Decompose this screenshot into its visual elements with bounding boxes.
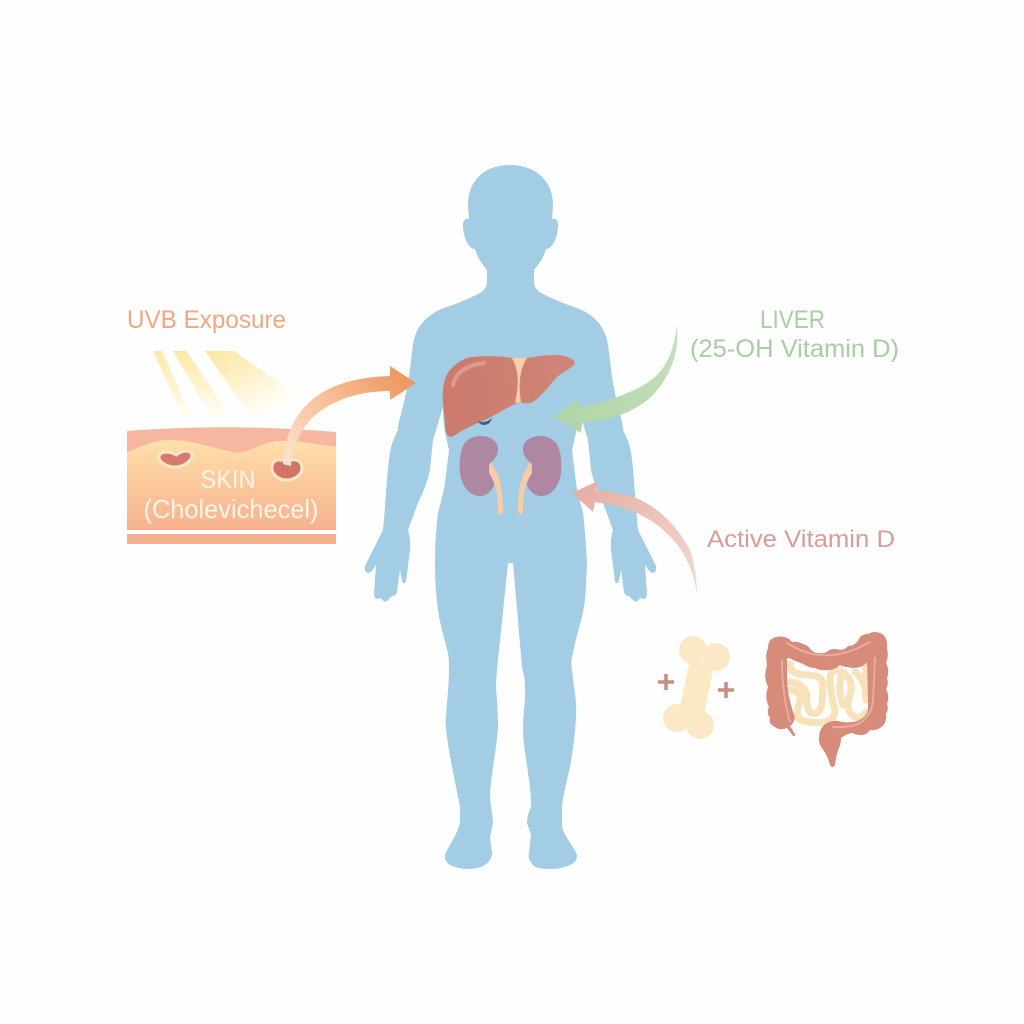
right kidney [523,436,561,496]
liver panel [553,306,899,433]
liver highlight [453,363,484,385]
label: LIVER (25-OH Vitamin D): (25-OH Vitamin D) [690,335,899,363]
liver ligament [512,358,527,403]
icon: right skin cell [272,460,302,480]
small intestine [790,664,866,723]
large intestine [765,632,888,767]
icon: plus right [718,682,734,698]
active vitamin D panel [572,481,895,767]
label: SKIN (Cholevichecel): SKIN [200,466,256,494]
arrow: skin to body [283,366,416,466]
arrow: liver to body [553,325,677,433]
label: LIVER (25-OH Vitamin D): LIVER [760,306,825,334]
heading: UVB Exposure: UVB Exposure [127,306,286,334]
icon: bone [663,636,730,739]
left ureter [489,462,503,514]
kidneys [460,436,561,514]
human body silhouette [365,165,656,869]
arrow: active vitamin D to body [572,481,697,593]
UVB exposure panel [127,306,416,544]
icon: intestines [765,632,888,767]
panel: skin cross-section [127,427,336,544]
icon: plus left [658,674,674,690]
label: LIVER (25-OH Vitamin D) [690,306,899,363]
icon: left skin cell [159,451,192,467]
right ureter [518,462,532,514]
left kidney [460,436,498,496]
label: Active Vitamin D: Active Vitamin D [707,526,895,553]
colon highlights [782,642,875,727]
label: SKIN (Cholevichecel): (Cholevichecel) [144,494,318,524]
gallbladder [478,418,492,425]
icon: sun rays [153,351,302,419]
label: SKIN (Cholevichecel) [144,466,318,524]
liver organ [443,355,575,437]
